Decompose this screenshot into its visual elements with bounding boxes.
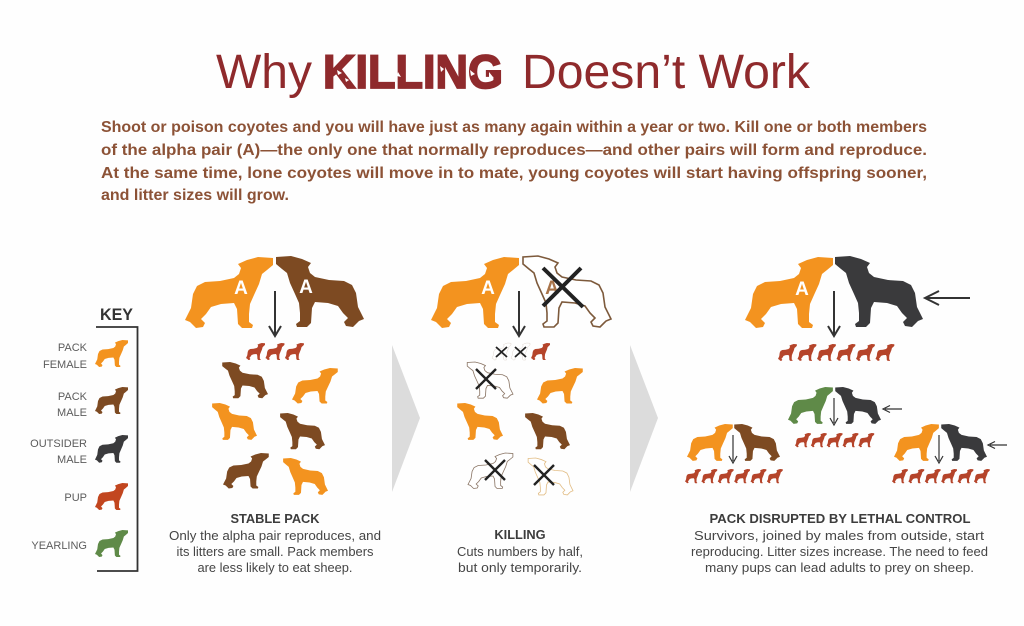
- title: Why: [216, 46, 312, 99]
- panel: killing: [431, 256, 611, 575]
- arrow: chevron to disrupted pack: [630, 345, 658, 492]
- caption: stable pack: its litters are small. Pack members: [176, 544, 374, 559]
- alpha pair with killed male: [431, 256, 611, 328]
- pups, two killed: [492, 343, 550, 360]
- key heading: KEY: [100, 305, 134, 324]
- panel: key: [30, 305, 138, 571]
- yearling pair: [788, 387, 902, 447]
- caption: stable pack: Only the alpha pair reproduces, and: [169, 528, 381, 543]
- intro text block: and litter sizes will grow.: [101, 187, 289, 204]
- pack members: [212, 362, 338, 495]
- caption: pack disrupted: Survivors, joined by males from outside, start: [694, 528, 984, 543]
- caption: stable pack: [169, 511, 381, 575]
- key: pack female: [43, 340, 128, 371]
- key bracket: [96, 327, 138, 571]
- key: outsider male: OUTSIDER: [30, 438, 87, 450]
- key: pack female: FEMALE: [43, 359, 87, 371]
- caption: killing: [457, 527, 583, 575]
- pups: [246, 343, 304, 360]
- key: yearling: YEARLING: [31, 540, 87, 552]
- alpha pair: A: [234, 278, 248, 299]
- key: yearling: [31, 530, 128, 557]
- arrow: [513, 291, 525, 336]
- caption: pack disrupted: reproducing. Litter sizes increase. The need to feed: [691, 544, 988, 559]
- arrow: chevron to killing: [392, 345, 420, 492]
- caption: killing: KILLING: [494, 527, 546, 542]
- alpha pair with killed male: A: [481, 278, 495, 299]
- alpha pair: [185, 256, 364, 328]
- arrow: [269, 291, 281, 336]
- key: pack female: PACK: [58, 342, 88, 354]
- caption: pack disrupted: many pups can lead adults to prey on sheep.: [705, 560, 974, 575]
- caption: stable pack: STABLE PACK: [230, 511, 320, 526]
- key: pup: PUP: [64, 492, 87, 504]
- key: pack male: PACK: [58, 391, 88, 403]
- left pair: [685, 424, 783, 483]
- title: [216, 45, 811, 99]
- intro text block: of the alpha pair (A)—the only one that normally reproduces—and other pairs will form and reproduce.: [101, 142, 927, 159]
- caption: stable pack: are less likely to eat sheep.: [198, 560, 352, 575]
- caption: killing: Cuts numbers by half,: [457, 544, 583, 559]
- panel: pack disrupted: [685, 256, 1007, 575]
- intro text block: At the same time, lone coyotes will move in to mate, young coyotes will start having offspring sooner,: [101, 165, 927, 182]
- right pair: [892, 424, 1007, 483]
- caption: pack disrupted: PACK DISRUPTED BY LETHAL CONTROL: [710, 511, 971, 526]
- pack members, half killed: [457, 362, 583, 495]
- main pair with outsider male: [745, 256, 970, 361]
- key: pup: [64, 483, 128, 510]
- intro text block: Shoot or poison coyotes and you will have just as many again within a year or two. Kill one or both members: [101, 119, 927, 136]
- title: Doesn’t Work: [522, 46, 811, 99]
- alpha pair: A: [299, 277, 313, 298]
- key: pack male: MALE: [57, 407, 87, 419]
- main pair with outsider male: A: [795, 279, 809, 300]
- key: outsider male: MALE: [57, 454, 87, 466]
- key: outsider male: [30, 435, 128, 466]
- alpha pair with killed male: A: [545, 278, 559, 299]
- panel: stable pack: [169, 256, 381, 575]
- title: KILLING: [323, 45, 503, 98]
- caption: pack disrupted: [691, 511, 988, 575]
- key: pack male: [57, 387, 128, 419]
- intro text block: [101, 119, 927, 204]
- caption: killing: but only temporarily.: [458, 560, 582, 575]
